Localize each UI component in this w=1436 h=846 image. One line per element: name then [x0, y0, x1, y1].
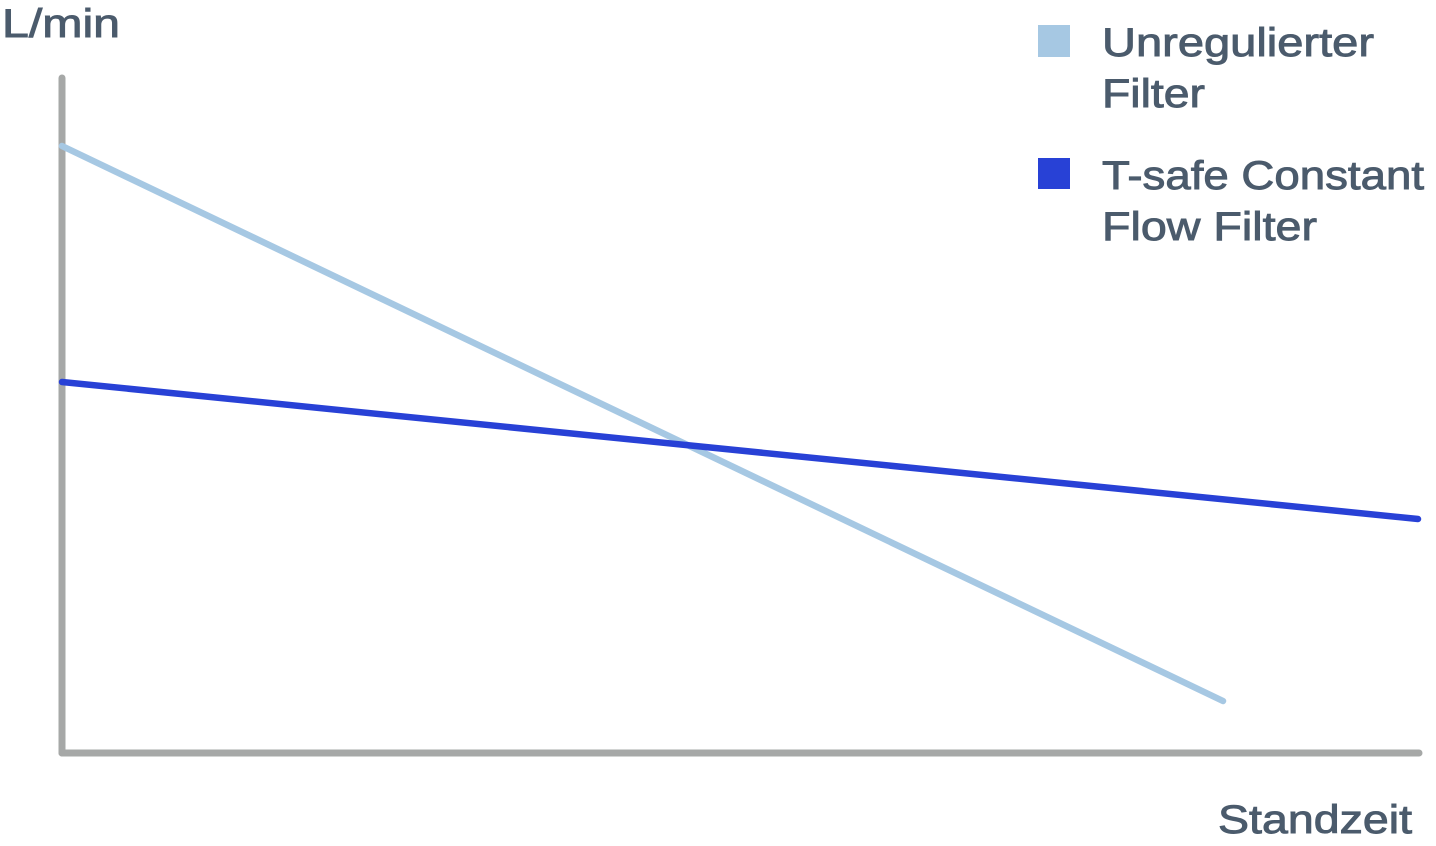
legend item: unregulated: [1038, 21, 1374, 116]
axes: [62, 78, 1419, 753]
line: unregulated filter: [62, 146, 1223, 701]
legend item: unregulated: Filter: [1102, 72, 1205, 116]
line: T-safe constant flow filter: [62, 382, 1418, 519]
legend item: T-safe: Flow Filter: [1102, 205, 1317, 249]
legend item: T-safe: T-safe Constant: [1102, 154, 1424, 198]
legend item: T-safe: [1038, 154, 1424, 249]
x-axis label: Standzeit: [1218, 798, 1412, 842]
legend item: unregulated: Unregulierter: [1102, 21, 1374, 65]
legend: [1038, 21, 1424, 249]
y-axis label: L/min: [2, 2, 120, 46]
